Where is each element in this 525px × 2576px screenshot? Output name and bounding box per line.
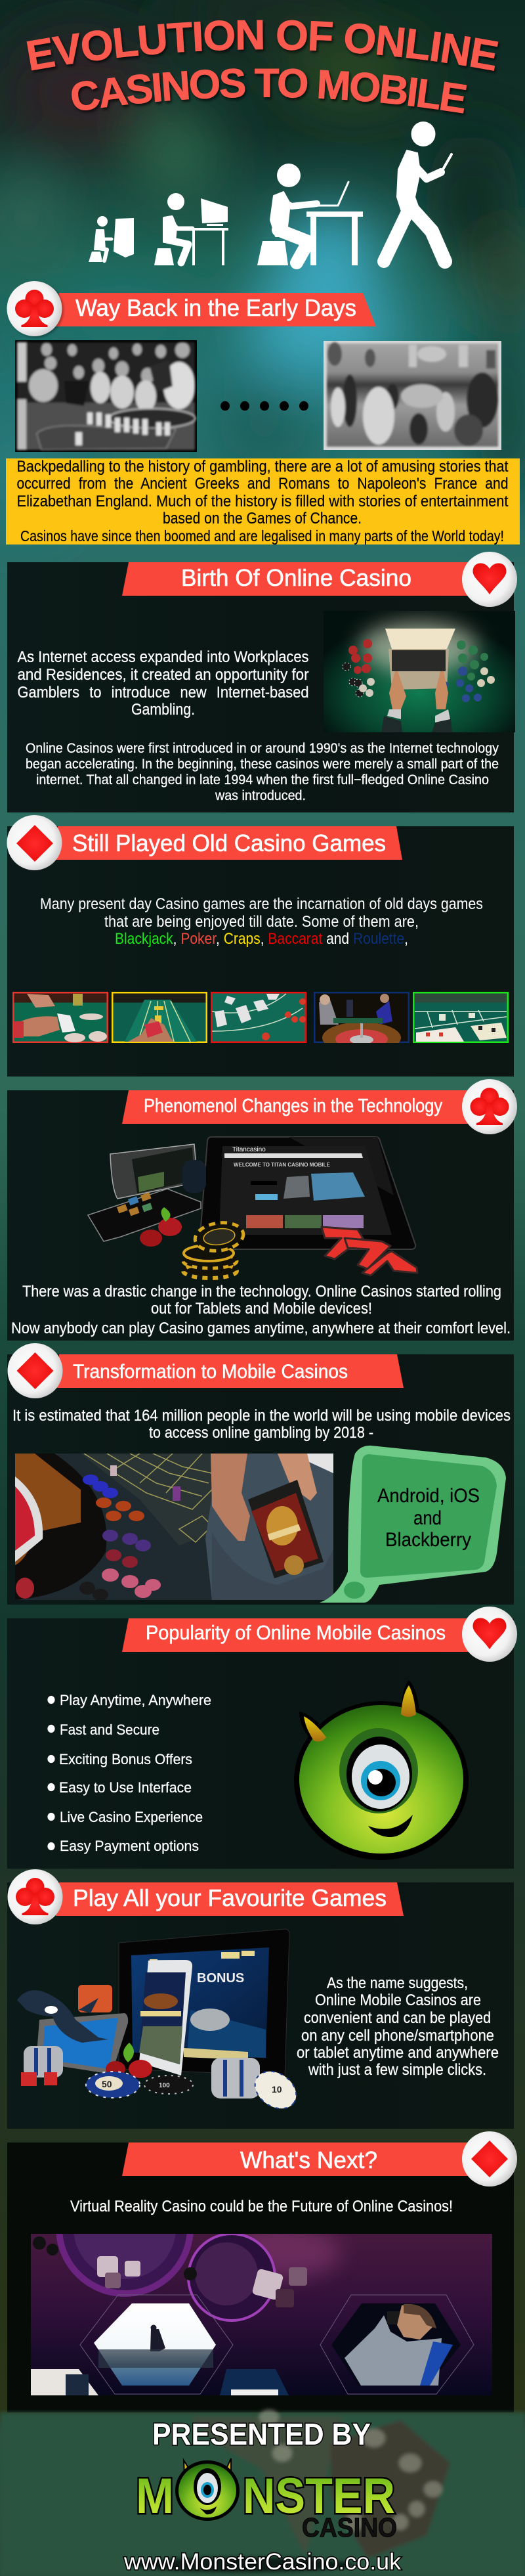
- panel: popularity of online mobile casinos: [7, 1607, 517, 1869]
- tablet: [200, 1137, 415, 1249]
- callout: supported platforms: [320, 1446, 506, 1603]
- figure: arcade player: [89, 216, 134, 262]
- hexagon: man in vr headset: [320, 2295, 474, 2394]
- illustration: tablet and phone with chips: 10: [272, 2084, 282, 2095]
- icon: diamond badge: [462, 2131, 517, 2187]
- panel: transformation to mobile casinos: [7, 1343, 514, 1605]
- footer background: dice on felt: [0, 2409, 525, 2576]
- thumbnail: craps: [112, 992, 207, 1043]
- ribbon heading: Still Played Old Casino Games: [72, 830, 386, 856]
- thumbnail: baccarat: [413, 992, 509, 1043]
- title: CASINOS TO MOBILE: [72, 68, 469, 116]
- bullet list: [47, 1692, 211, 1854]
- whale: [17, 1990, 108, 2043]
- monster mascot: [294, 1680, 469, 1860]
- text: game list: Many present day Casino games are the incarnation of old days games: [40, 895, 483, 913]
- icon: club badge: [462, 1079, 517, 1134]
- icon: diamond badge: [7, 815, 62, 870]
- callout: supported platforms: Blackberry: [385, 1529, 471, 1551]
- image: virtual reality casino: [31, 2234, 492, 2395]
- text: online casino history: [26, 741, 499, 803]
- bullet list: Play Anytime, Anywhere: [60, 1692, 211, 1708]
- text: virtual reality: Virtual Reality Casino could be the Future of Online Casinos!: [70, 2198, 453, 2215]
- silver chips: [24, 2046, 63, 2077]
- phone lower: [88, 1189, 201, 1241]
- text box: yellow history: [6, 458, 520, 544]
- cherries: [140, 1207, 182, 1247]
- ribbon heading: Phenomenol Changes in the Technology: [144, 1096, 442, 1117]
- text: as the name suggests: Online Mobile Casinos are: [315, 1991, 481, 2009]
- footer: website: www.MonsterCasino.co.uk: [123, 2549, 401, 2575]
- bullet list: Fast and Secure: [60, 1721, 159, 1738]
- white stack: [211, 2058, 260, 2099]
- text: internet access: [17, 648, 309, 719]
- text: game list: Blackjack, Poker, Craps, Baccarat and Roulette,: [115, 930, 408, 948]
- small tablet: [36, 2013, 128, 2074]
- phone: [139, 1960, 192, 2076]
- logo: monster casino: M: [136, 2468, 174, 2524]
- small hexagons: [31, 2369, 289, 2395]
- text: 164 million: [12, 1407, 511, 1442]
- ribbon heading: Birth Of Online Casino: [181, 564, 411, 591]
- text: online casino history: Online Casinos were first introduced in or around 1990's as the Internet technology: [26, 741, 499, 756]
- text: as the name suggests: [297, 1974, 499, 2079]
- ribbon heading: [122, 1090, 472, 1124]
- logo: monster casino: [136, 2458, 397, 2543]
- icon: club badge: [7, 281, 64, 338]
- text box: yellow history: based on the Games of Chance.: [163, 510, 362, 527]
- section: way back in the early days: [6, 281, 520, 544]
- illustration: tablet and phone with chips: [17, 1929, 303, 2116]
- ribbon heading: Way Back in the Early Days: [75, 294, 356, 321]
- dark die right: [330, 2420, 450, 2558]
- text: online casino history: began accelerating. In the beginning, these casinos were merely a small part of the: [26, 757, 499, 772]
- panel: what's next: [7, 2131, 517, 2412]
- white chip upright: [248, 2064, 303, 2116]
- dice: [21, 2072, 37, 2086]
- text: internet access: and Residences, it created an opportunity for: [17, 666, 309, 684]
- red sevens: [322, 1227, 417, 1276]
- text: 164 million: to access online gambling by 2018 -: [149, 1424, 373, 1442]
- panel: birth of online casino: [7, 552, 517, 812]
- thumbnail: blackjack: [211, 992, 306, 1043]
- illustration: tablet and phone with chips: 50: [102, 2079, 112, 2089]
- tablet: Titancasino: [232, 1146, 266, 1153]
- red die left: [190, 2417, 341, 2555]
- ribbon heading: Play All your Favourite Games: [73, 1884, 387, 1911]
- text: as the name suggests: with just a few simple clicks.: [308, 2061, 486, 2079]
- title: [26, 20, 500, 116]
- ribbon heading: [56, 1354, 404, 1388]
- text: internet access: Gambling.: [131, 701, 195, 719]
- text: online casino history: internet. That all changed in late 1994 when the first full−fledged Online Casino: [36, 772, 489, 788]
- text: internet access: As Internet access expanded into Workplaces: [17, 648, 308, 666]
- icon: diamond badge: [8, 1343, 63, 1398]
- photo: roulette and phone in pocket: [15, 1454, 333, 1600]
- logo: monster casino: CASINO: [302, 2512, 397, 2543]
- text: as the name suggests: As the name suggests,: [327, 1974, 468, 1992]
- ribbon heading: Popularity of Online Mobile Casinos: [146, 1621, 446, 1644]
- evolution figures: [89, 122, 452, 265]
- ribbon heading: [122, 1618, 472, 1652]
- photo: laptop with chips: [324, 611, 515, 732]
- blue chip: [86, 2072, 140, 2098]
- text: internet access: Gamblers to introduce new Internet-based: [17, 684, 308, 701]
- text: online casino history: was introduced.: [215, 788, 306, 803]
- text: as the name suggests: or tablet anytime and anywhere: [297, 2044, 499, 2062]
- bullet list: Live Casino Experience: [60, 1809, 203, 1825]
- illustration: tablet and phone with chips: 100: [159, 2082, 170, 2089]
- text: drastic change: [11, 1283, 511, 1337]
- text: as the name suggests: convenient and can be played: [304, 2009, 491, 2027]
- logo: monster casino: NSTER: [243, 2468, 395, 2524]
- text: game list: [40, 895, 483, 948]
- stack of gold chips: [183, 1220, 245, 1278]
- black chip: [144, 2076, 193, 2094]
- text: game list: that are being enjoyed till date. Some of them are,: [104, 913, 419, 931]
- panel: phenomenol changes: [7, 1079, 517, 1341]
- icon: club badge: [8, 1869, 63, 1924]
- ribbon heading: [122, 2143, 472, 2176]
- bullet list: Easy Payment options: [60, 1838, 199, 1854]
- chip stack blue: [182, 1160, 206, 1193]
- figure: laptop user: [257, 164, 363, 265]
- panel: play all your favourite games: [7, 1869, 514, 2129]
- phone upper: [110, 1144, 198, 1199]
- thumbnail: poker: [12, 992, 108, 1043]
- photo: vintage casino hall: [324, 341, 501, 450]
- cherries: [129, 2060, 152, 2078]
- ribbon heading: [122, 562, 472, 596]
- bullet list: Exciting Bonus Offers: [59, 1751, 192, 1767]
- icon: heart badge: [462, 1607, 517, 1662]
- footer: presented by: PRESENTED BY: [152, 2417, 371, 2451]
- ribbon heading: What's Next?: [240, 2146, 377, 2173]
- figure: mobile user: [384, 122, 452, 261]
- title: EVOLUTION OF ONLINE: [26, 20, 500, 74]
- ribbon heading: Transformation to Mobile Casinos: [73, 1361, 348, 1383]
- hexagon: presenter: [80, 2295, 233, 2394]
- illustration: tablet and phone with chips: BONUS: [197, 1971, 244, 1986]
- panel: still played old casino games: [7, 815, 514, 1077]
- photo: roulette table black and white: [15, 340, 197, 452]
- callout: supported platforms: Android, iOS: [377, 1485, 480, 1507]
- figure: desktop user: [154, 193, 228, 265]
- bullet list: Easy to Use Interface: [59, 1779, 192, 1796]
- callout: supported platforms: and: [413, 1507, 442, 1529]
- thumbnail: roulette: [314, 992, 410, 1043]
- orange chip stack: [78, 1985, 112, 2012]
- text: drastic change: out for Tablets and Mobile devices!: [151, 1300, 372, 1318]
- tablet: WELCOME TO TITAN CASINO MOBILE: [234, 1162, 330, 1168]
- icon: heart badge: [462, 552, 517, 607]
- dots connector: [220, 401, 308, 411]
- text: as the name suggests: on any cell phone/smartphone: [301, 2027, 494, 2045]
- logo monster eye: [175, 2458, 240, 2521]
- illustration: tablet, phones and chips: [88, 1137, 417, 1278]
